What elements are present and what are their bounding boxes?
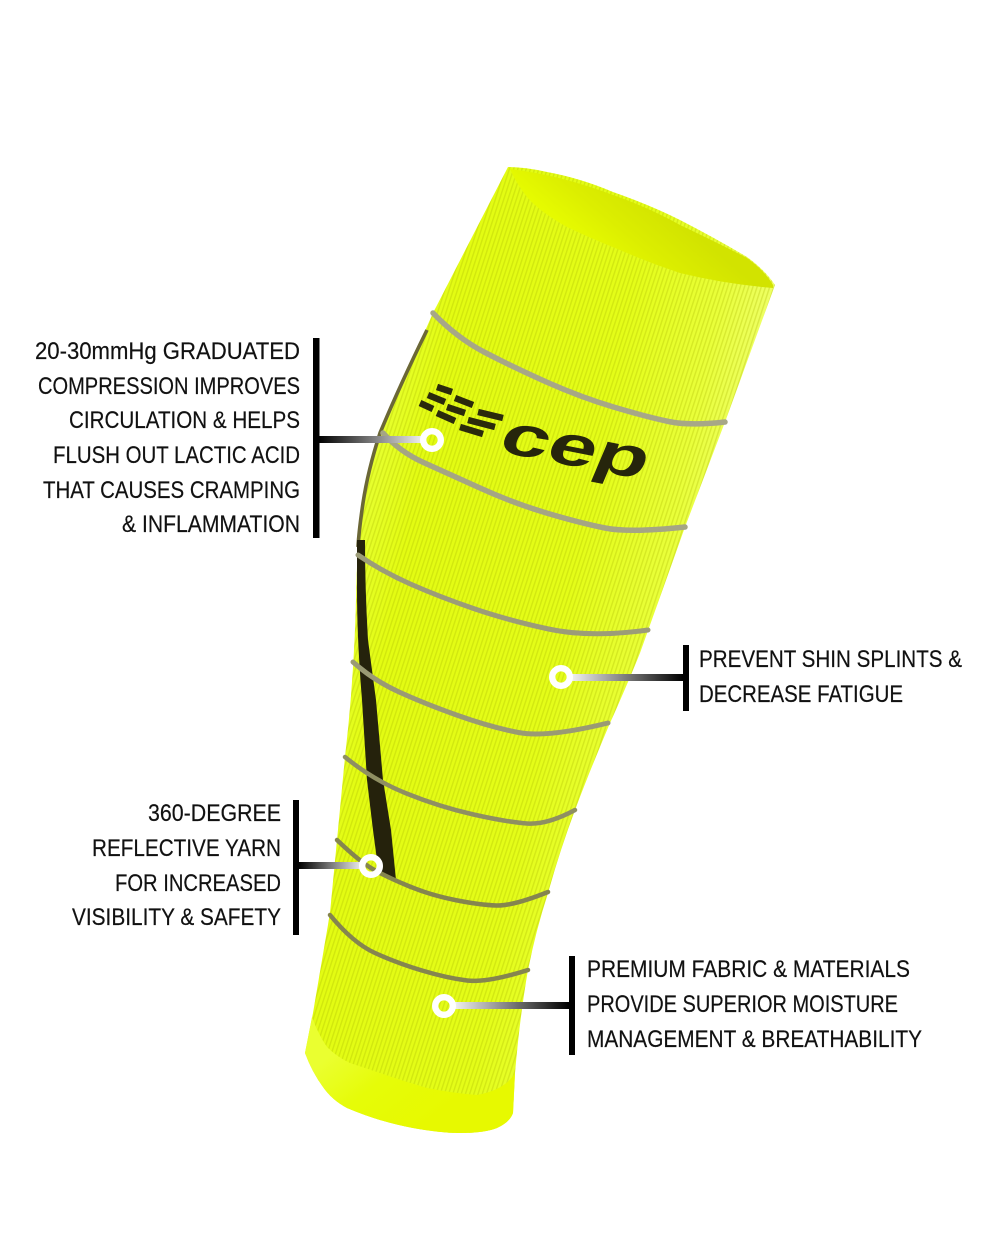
reflective bands xyxy=(330,313,725,981)
bottom hem xyxy=(305,1017,515,1133)
sleeve body xyxy=(305,167,775,1133)
marker ring xyxy=(423,431,441,449)
bracket bar xyxy=(313,338,320,538)
marker ring xyxy=(362,857,380,875)
callout: reflective yarn xyxy=(72,800,380,935)
dark side stripe xyxy=(357,540,396,880)
callout text: PREMIUM FABRIC & MATERIALS xyxy=(587,956,910,983)
callout text: & INFLAMMATION xyxy=(122,511,300,538)
callout text xyxy=(35,338,300,538)
callout text xyxy=(72,800,281,931)
callout text: THAT CAUSES CRAMPING xyxy=(43,477,300,504)
left edge seam xyxy=(358,330,427,547)
calf sleeve xyxy=(305,167,775,1133)
connector line xyxy=(299,862,362,869)
cep logo xyxy=(420,387,662,491)
connector line xyxy=(319,436,422,443)
callout text: CIRCULATION & HELPS xyxy=(69,407,300,434)
bracket bar xyxy=(293,800,299,935)
top opening xyxy=(510,169,773,288)
callout text: PREVENT SHIN SPLINTS & xyxy=(699,646,962,673)
bracket bar xyxy=(569,956,575,1055)
callout: shin splints xyxy=(552,645,962,711)
marker ring xyxy=(435,997,453,1015)
callout text: FLUSH OUT LACTIC ACID xyxy=(53,442,300,469)
logo mark dashes xyxy=(420,387,503,434)
callout text: MANAGEMENT & BREATHABILITY xyxy=(587,1026,922,1053)
connector line xyxy=(571,674,683,681)
callout text: 360-DEGREE xyxy=(148,800,281,827)
callout: premium fabric xyxy=(435,956,922,1055)
callout: compression xyxy=(35,338,441,538)
knit rib texture xyxy=(305,167,775,1133)
callout text: FOR INCREASED xyxy=(115,870,281,897)
logo wordmark: cep xyxy=(491,402,662,491)
callout text: 20-30mmHg GRADUATED xyxy=(35,338,300,365)
callout text: REFLECTIVE YARN xyxy=(92,835,281,862)
callout text xyxy=(587,956,922,1053)
callout text: DECREASE FATIGUE xyxy=(699,681,903,708)
callout text: PROVIDE SUPERIOR MOISTURE xyxy=(587,991,898,1018)
callout text xyxy=(699,646,962,708)
callout text: COMPRESSION IMPROVES xyxy=(38,373,300,400)
bracket bar xyxy=(683,645,689,711)
callout text: VISIBILITY & SAFETY xyxy=(72,904,281,931)
marker ring xyxy=(552,668,570,686)
connector line xyxy=(454,1002,569,1009)
